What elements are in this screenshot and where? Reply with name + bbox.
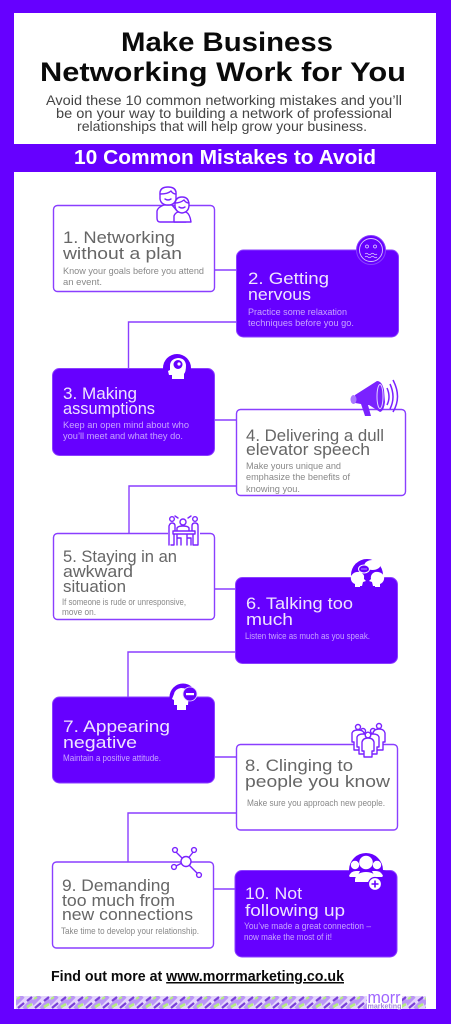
card 5: situation [63, 577, 126, 596]
title: Make Business [121, 27, 333, 57]
card 4: emphasize the benefits of [246, 472, 350, 483]
card 7: Maintain a positive attitude. [63, 753, 161, 764]
icon: group of people [352, 724, 385, 757]
card 3: 3. Making [63, 384, 137, 403]
card 6: much [246, 610, 293, 629]
card 2 [236, 250, 398, 337]
card 7: 7. Appearing [63, 717, 170, 736]
card 9: too much from [62, 891, 175, 910]
card 10 [235, 870, 397, 957]
card 9: new connections [62, 905, 193, 924]
card 5: move on. [62, 607, 96, 618]
footer call to action: Find out more at www.morrmarketing.co.uk [51, 968, 345, 985]
card 6: 6. Talking too [246, 594, 353, 613]
intro text [46, 92, 402, 134]
icon: network nodes [172, 848, 201, 877]
card 7: negative [63, 733, 137, 752]
header panel [14, 13, 436, 144]
card 6 [236, 578, 398, 664]
card 5: If someone is rude or unresponsive, [62, 597, 186, 608]
icon: people at table [168, 516, 200, 545]
icon: nervous face [356, 236, 386, 264]
main white panel [14, 172, 436, 1009]
intro text: be on your way to building a network of professional [56, 105, 392, 121]
card 8 [236, 744, 398, 830]
card 3: you’ll meet and what they do. [63, 431, 183, 442]
icon: two friends [157, 187, 191, 222]
card 2: 2. Getting [248, 269, 329, 288]
icon: negative head [170, 684, 197, 710]
title [40, 27, 406, 87]
card 3 [52, 368, 214, 456]
card 4: knowing you. [246, 484, 300, 495]
card 9 [52, 862, 214, 948]
card 1: 1. Networking [63, 228, 175, 247]
card 4: elevator speech [246, 440, 370, 459]
card 2: techniques before you go. [248, 318, 354, 329]
intro text: relationships that will help grow your business. [77, 118, 367, 134]
card 10: now make the most of it! [244, 932, 332, 943]
card 4: Make yours unique and [246, 461, 341, 472]
card 10: following up [245, 901, 345, 920]
icon: two heads talking [351, 559, 384, 591]
card 4 [236, 410, 406, 496]
card 10: 10. Not [245, 884, 302, 903]
card 3: assumptions [63, 399, 155, 418]
decorative footer band with logo [16, 988, 426, 1011]
card 8: Make sure you approach new people. [247, 798, 385, 809]
section heading: 10 Common Mistakes to Avoid [74, 147, 376, 169]
card 5: 5. Staying in an [63, 547, 177, 566]
icon: megaphone [350, 380, 398, 416]
card 3: Keep an open mind about who [63, 420, 189, 431]
card 10: You’ve made a great connection – [244, 921, 372, 932]
intro text: Avoid these 10 common networking mistakes and you’ll [46, 92, 402, 108]
card 5 [54, 534, 214, 620]
card 9: Take time to develop your relationship. [61, 926, 199, 937]
card 8: 8. Clinging to [245, 756, 353, 775]
card 2: nervous [248, 285, 311, 304]
title: Networking Work for You [40, 57, 406, 87]
decorative footer band with logo: morr [368, 988, 401, 1007]
card 4: 4. Delivering a dull [246, 426, 384, 445]
connector lines [128, 270, 236, 889]
card 2: Practice some relaxation [248, 307, 347, 318]
icon: head with thought [163, 354, 191, 382]
card 6: Listen twice as much as you speak. [245, 631, 370, 642]
card 1: Know your goals before you attend [63, 266, 204, 277]
card 5: awkward [63, 562, 133, 581]
card 1: an event. [63, 277, 102, 288]
decorative footer band with logo: marketing [368, 1004, 402, 1011]
card 9: 9. Demanding [62, 876, 170, 895]
card 1 [54, 206, 214, 292]
card 7 [52, 697, 214, 783]
card 8: people you know [245, 772, 391, 791]
icon: add user group [349, 853, 386, 890]
card 1: without a plan [62, 244, 182, 263]
